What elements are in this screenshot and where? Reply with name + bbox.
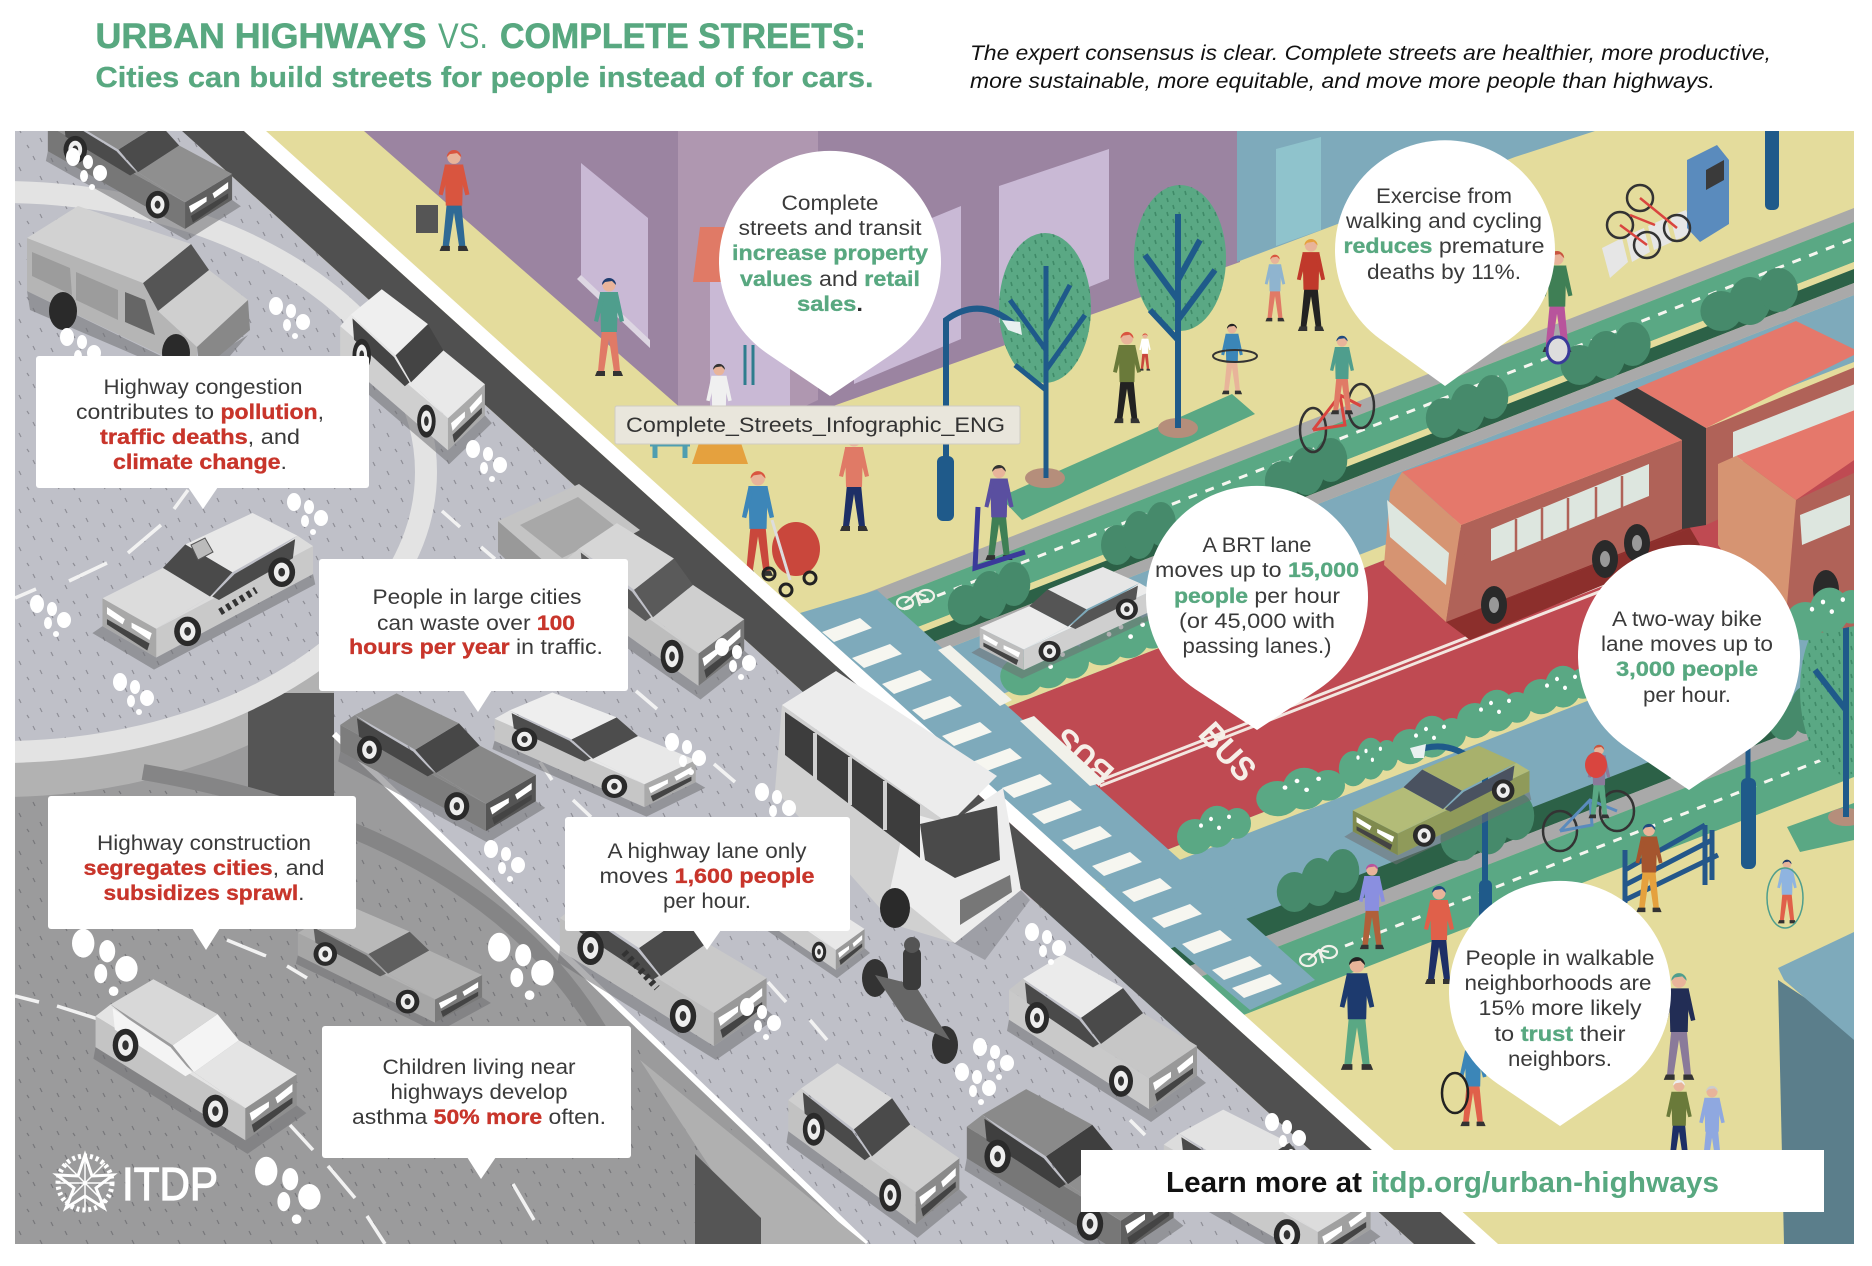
wheelchair user [1442, 1038, 1486, 1126]
street lamps [937, 125, 1779, 920]
rear section side [1706, 365, 1860, 525]
hula hoop girl [1221, 324, 1243, 394]
car: dark SUV middle [338, 693, 545, 843]
lamp upper left [946, 309, 1015, 500]
elder man [1666, 1080, 1692, 1163]
green car [1344, 746, 1531, 865]
upper yellow strip [918, 262, 1854, 627]
car: dark SUV top [46, 95, 241, 240]
callout: wasted hours: People in large cities [372, 585, 582, 609]
charging kiosk [1687, 145, 1729, 242]
bubble: trust: neighborhoods are [1464, 971, 1652, 995]
callout: congestion: Highway congestion [104, 375, 302, 399]
bus lane labels: BUS [1047, 720, 1121, 792]
stroller [763, 520, 820, 596]
van [27, 206, 250, 385]
callout: highway lane capacity [565, 817, 850, 950]
shadow lower edge [1446, 528, 1700, 640]
callout: wasted hours: hours per year in traffic. [349, 635, 603, 659]
lower planter [1112, 731, 1776, 989]
bike rack [1602, 210, 1694, 278]
callout: segregation: segregates cities , and [84, 856, 324, 880]
shrub over bus [1786, 588, 1867, 640]
person with tablet [839, 433, 869, 531]
kick scooter [975, 507, 1025, 568]
car: light car lower ramp [93, 979, 306, 1154]
lower right teal building [1778, 932, 1854, 1244]
bus side [1446, 440, 1682, 622]
bus lane labels [1062, 720, 1255, 786]
building roof [1778, 932, 1854, 1040]
walking woman [1663, 973, 1695, 1080]
shadow under bus [1430, 515, 1690, 622]
bubble: bike lane capacity [1578, 545, 1800, 790]
lighter building column [678, 131, 818, 406]
stop bar lower [1020, 716, 1105, 786]
car: white SUV [1007, 955, 1206, 1122]
motorcycle [862, 937, 958, 1064]
guitarist [439, 150, 469, 251]
lamp lower right base [1741, 778, 1756, 869]
callout: segregation: subsidizes sprawl . [104, 881, 304, 905]
bubble: property values: values and retail [740, 267, 920, 291]
woman at window [594, 278, 624, 376]
callout: asthma: Children living near [382, 1055, 576, 1079]
lanes base [15, 131, 1414, 1244]
amplifier [416, 205, 438, 233]
side windows [1491, 464, 1649, 561]
awning [693, 227, 725, 282]
bubble: property values [719, 151, 941, 396]
kiosk screen [1706, 160, 1724, 190]
rear windows [1733, 382, 1860, 465]
callout: congestion: contributes to pollution , [76, 400, 324, 424]
white bus [775, 671, 1030, 960]
bus roof [1402, 398, 1682, 525]
bubble: exercise: Exercise from [1376, 184, 1512, 208]
bubble: BRT capacity: (or 45,000 with [1179, 609, 1335, 633]
walking adult [1297, 239, 1325, 331]
circular ramp [0, 192, 426, 752]
bubble: bike lane capacity: lane moves up to [1601, 632, 1773, 656]
window sill [577, 275, 650, 348]
car: light car bottom [1162, 1110, 1380, 1266]
car: light SUV lower [786, 1063, 968, 1238]
elder woman [1699, 1086, 1725, 1169]
lane dashes [870, 236, 1860, 946]
bubble: exercise: reduces premature [1344, 234, 1544, 258]
window centre [854, 206, 961, 384]
callout: highway lane capacity: moves 1,600 people [600, 864, 815, 888]
bubble: BRT capacity: A BRT lane [1202, 533, 1312, 557]
red bus lane [978, 460, 1854, 902]
taxi sign [191, 538, 213, 560]
footer link banner: Learn more at [1166, 1167, 1362, 1199]
articulation [1614, 388, 1706, 529]
blue bench [650, 444, 690, 458]
tree 1 [999, 233, 1091, 488]
intro text: The expert consensus is clear. Complete streets are healthier, more productive, [970, 42, 1771, 65]
trees [999, 185, 1872, 826]
lamp upper left head [1002, 320, 1022, 335]
upper hedges [948, 268, 1798, 625]
stop bar upper [938, 645, 1012, 706]
people [416, 150, 1803, 1169]
callout: wasted hours: can waste over 100 [377, 611, 575, 635]
windshield [1387, 500, 1449, 585]
skateboarder [1359, 864, 1385, 949]
blue vehicle lanes [952, 295, 1854, 971]
upper curb [800, 206, 1860, 633]
car: sedan on lower ramp [296, 906, 491, 1032]
bus lane labels: BUS [1191, 715, 1263, 789]
lower ramp side [640, 1060, 866, 1244]
baby [1139, 333, 1151, 371]
tree 3 [1800, 605, 1872, 826]
blue building [1237, 131, 1595, 262]
upper planter [800, 267, 1860, 694]
bus front [1384, 472, 1461, 622]
footer link banner [1081, 1150, 1824, 1212]
bubble: trust: People in walkable [1466, 946, 1654, 970]
walking child [1265, 255, 1285, 321]
kid with jump rope [1767, 860, 1803, 928]
median shrubs [1000, 613, 1597, 854]
callout: highway lane capacity: A highway lane only [608, 839, 807, 863]
lamp lower right [1746, 735, 1750, 800]
bus 2 side [1784, 470, 1860, 640]
road texture [15, 131, 1414, 1244]
bubble: trust: to trust their [1494, 1022, 1626, 1046]
unicycle rider [1542, 251, 1572, 363]
purple building [364, 131, 1240, 406]
car: pickup on ramp edge [339, 289, 492, 464]
exhaust puffs [30, 148, 1306, 1224]
bus 2 wheel [1813, 570, 1839, 610]
sidewalk green strip [1000, 394, 1255, 520]
window right [999, 149, 1109, 323]
bubble: trust [1449, 881, 1671, 1126]
callout: segregation: Highway construction [97, 831, 311, 855]
window left [581, 163, 648, 342]
upper planter edge [848, 283, 1854, 684]
car: white sedan [492, 692, 705, 817]
callout: wasted hours [319, 559, 628, 712]
articulated bus [1384, 321, 1860, 640]
ramp side wall [0, 213, 436, 797]
bubble: bike lane capacity: per hour. [1643, 683, 1731, 707]
title line 2: Cities can build streets for people instead of for cars. [96, 62, 874, 94]
taxi checks [220, 590, 256, 612]
mother [742, 471, 774, 576]
filename tooltip: Complete_Streets_Infographic_ENG [626, 414, 1005, 437]
bubble: trust: 15% more likely [1478, 996, 1642, 1020]
title [96, 17, 874, 94]
logo star [57, 1155, 113, 1211]
lamp upper left base [937, 456, 954, 521]
logo wordmark: ITDP [122, 1158, 218, 1210]
rear section roof [1637, 321, 1860, 428]
ramp texture [0, 203, 415, 741]
ITDP logo [57, 1155, 218, 1211]
lower ground texture [15, 790, 866, 1244]
filename tooltip [615, 406, 1020, 444]
lower planter edge [1133, 730, 1808, 998]
panel: highway side [0, 95, 1498, 1266]
intro text: more sustainable, more equitable, and move more people than highways. [970, 70, 1715, 93]
bubble: property values: streets and transit [738, 216, 922, 240]
bike share station [1602, 145, 1729, 278]
bus 2 roof [1736, 408, 1860, 500]
lamp lower [1414, 746, 1485, 900]
white edge stripe [244, 131, 1498, 1244]
callout: asthma [322, 1026, 631, 1179]
hoop [1213, 350, 1257, 362]
bubble: exercise [1335, 140, 1555, 386]
zebra crossing [822, 618, 1282, 998]
pillar [248, 693, 334, 796]
second bus [1718, 408, 1860, 640]
bus 2 front [1718, 456, 1796, 640]
lower bike lane [1143, 740, 1854, 1038]
intro text [970, 42, 1771, 93]
door handles [745, 345, 753, 385]
upper bike lane [800, 220, 1860, 673]
lamp lower head [1410, 744, 1426, 758]
sidewalk base [200, 131, 1860, 1244]
car: small white behind box [751, 870, 870, 978]
bench [1625, 825, 1718, 903]
shop door [710, 282, 790, 406]
panel: complete street side [200, 125, 1872, 1244]
car: taxi upper [92, 513, 315, 670]
bubble: trust: neighbors. [1508, 1047, 1612, 1071]
share bikes [1607, 185, 1690, 258]
title line 1: URBAN HIGHWAYS [96, 17, 426, 56]
callout: segregation [48, 796, 356, 950]
bubble: bike lane capacity: A two-way bike [1612, 607, 1762, 631]
footer link banner: itdp.org/urban-highways [1371, 1167, 1719, 1199]
standing man [1424, 886, 1454, 984]
lower ground [15, 690, 866, 1244]
bubble: bike lane capacity: 3,000 people [1616, 657, 1758, 681]
cyclist lower [1543, 745, 1634, 851]
bubble: BRT capacity: people per hour [1174, 584, 1340, 608]
road bands [800, 208, 1854, 1038]
callout: asthma: asthma 50% more often. [352, 1105, 606, 1129]
car: taxi lower [558, 880, 776, 1060]
title line 1: VS. [438, 17, 488, 56]
bubble: exercise: deaths by 11%. [1367, 260, 1521, 284]
callout: asthma: highways develop [390, 1080, 568, 1104]
title line 1: COMPLETE STREETS: [500, 17, 866, 56]
silver car [971, 567, 1154, 679]
parent [1113, 332, 1141, 423]
lower pillar [695, 1154, 761, 1244]
bubble: property values: increase property [732, 241, 928, 265]
window dividers [1460, 476, 1622, 565]
upper median curb [1004, 362, 1854, 707]
callout: congestion: traffic deaths , and [100, 425, 300, 449]
wheels [1481, 524, 1650, 624]
bus lane double line [1100, 584, 1604, 788]
callout: highway lane capacity: per hour. [663, 889, 751, 913]
man on bench [1636, 824, 1662, 912]
lower hedges [1277, 677, 1843, 912]
blue building column [1276, 137, 1321, 246]
pickup truck cab [564, 523, 753, 700]
left highway edge [334, 734, 866, 1244]
shoulder [182, 131, 1476, 1244]
lane markings [15, 490, 1145, 1244]
lower taxi checks [624, 952, 657, 988]
bubble: property values: sales . [797, 292, 863, 316]
lower median curb [1035, 698, 1588, 912]
bubble: exercise: walking and cycling [1345, 209, 1542, 233]
bike lane symbols [897, 590, 1337, 966]
bus 2 window [1800, 495, 1850, 545]
man with phone [1340, 957, 1374, 1070]
bubble: property values: Complete [782, 191, 878, 215]
callout: congestion [36, 356, 369, 509]
bubble: BRT capacity: moves up to 15,000 [1155, 558, 1359, 582]
lamp top right [1765, 125, 1779, 210]
lower right green strip [1787, 803, 1854, 852]
bubble: BRT capacity: passing lanes.) [1182, 634, 1332, 658]
person with hat [706, 364, 732, 447]
bubble: BRT capacity [1146, 486, 1368, 730]
lower ramp curb [143, 772, 600, 1032]
lamp lower base [1479, 880, 1492, 920]
pickup truck bed [498, 484, 640, 612]
skirt of person with hat [692, 440, 748, 464]
tree 2 [1134, 185, 1226, 438]
crossing road [800, 590, 1315, 1010]
building wall [1778, 980, 1854, 1244]
callout: congestion: climate change . [113, 450, 287, 474]
cyclist [1300, 336, 1374, 452]
scooter rider [984, 465, 1014, 560]
car: dark minivan [965, 1089, 1184, 1266]
